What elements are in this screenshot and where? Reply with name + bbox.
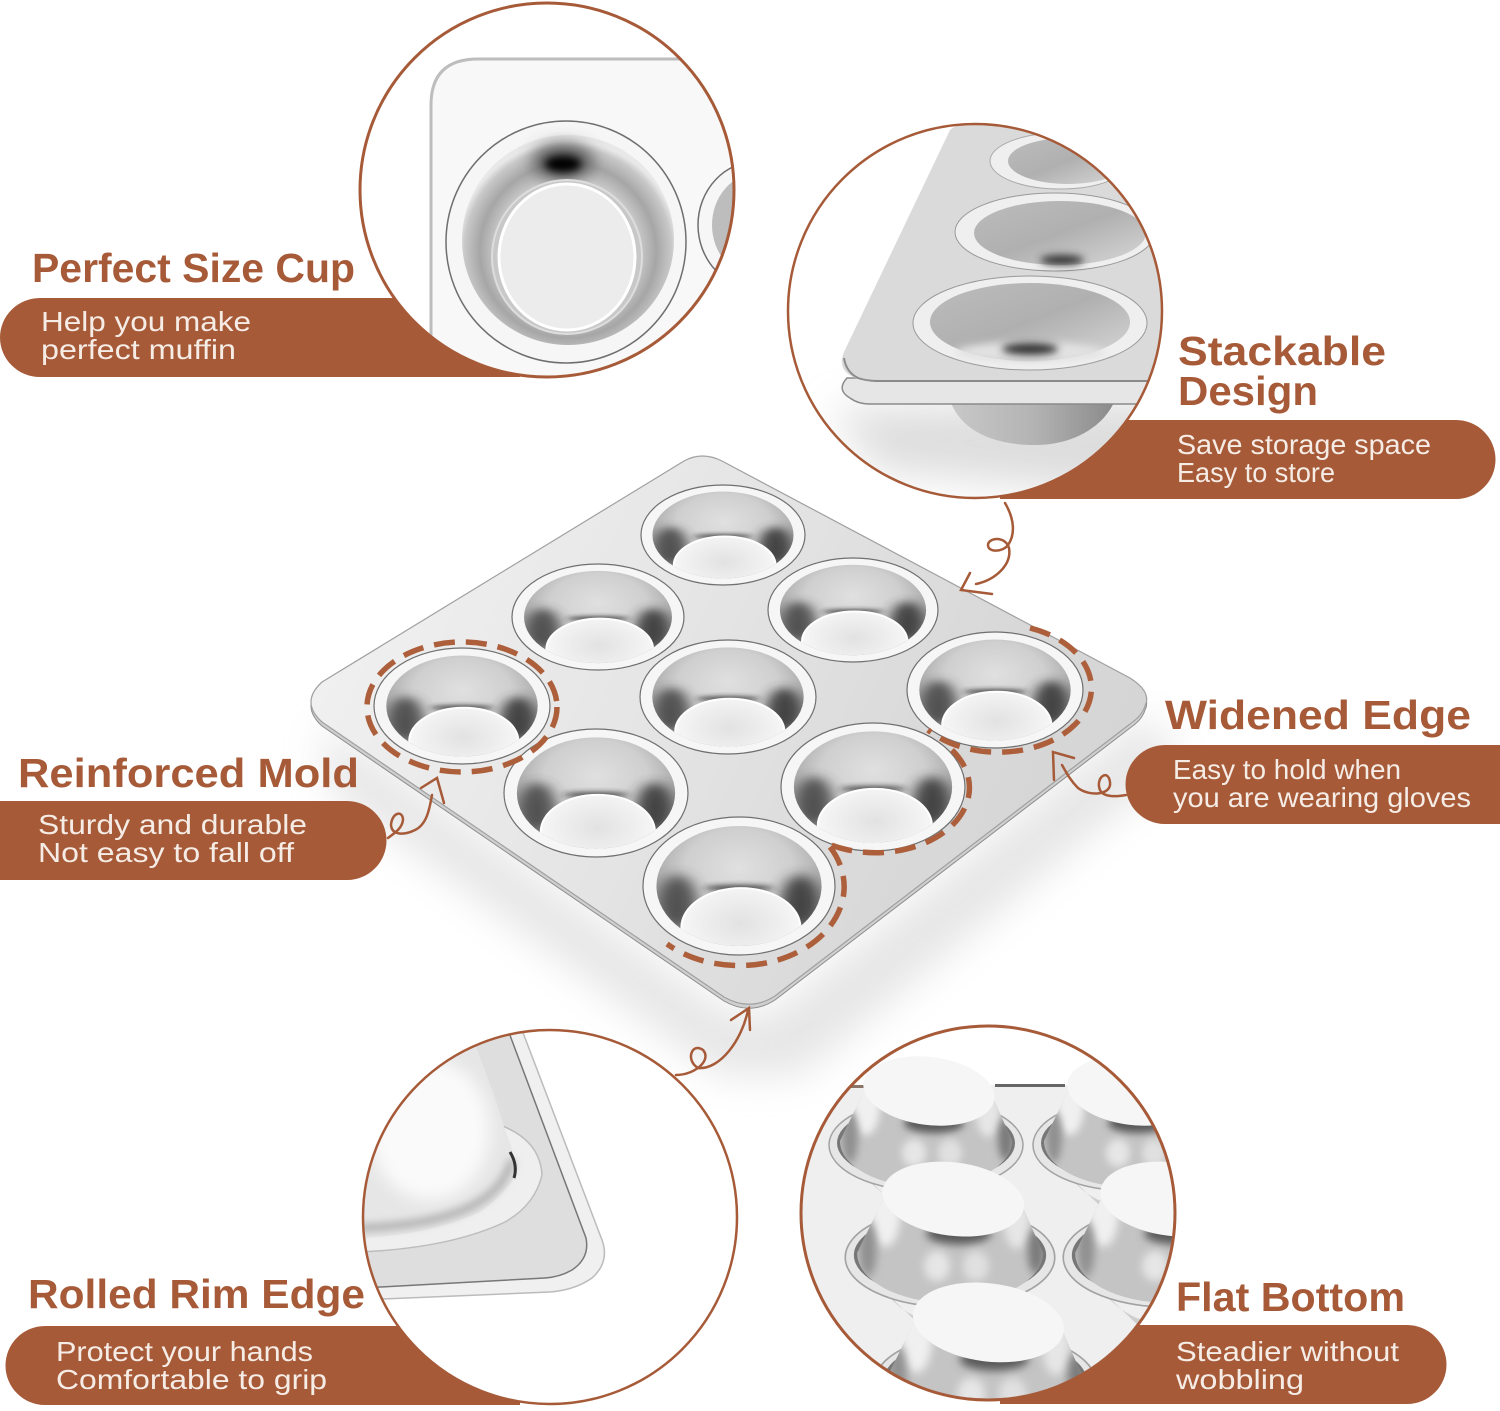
tray body (311, 456, 1147, 1004)
description: Protect your hands (56, 1336, 313, 1367)
pill (1126, 745, 1500, 824)
heading: Stackable (1178, 328, 1386, 374)
circle detail: cup top view (358, 2, 736, 378)
circle detail: rolled rim (360, 1030, 737, 1404)
pill (1000, 1325, 1446, 1404)
arrow: stackable design (961, 503, 1013, 594)
circle detail: inverted cups (800, 1024, 1176, 1402)
tray shadow (322, 716, 1180, 1075)
circle detail: stacked pans (788, 124, 1180, 500)
callout: perfect size cup (0, 245, 520, 377)
pill (1000, 420, 1496, 499)
callout: widened edge (1126, 692, 1500, 824)
callout: reinforced mold (0, 750, 386, 880)
heading: Design (1178, 368, 1318, 414)
description: Sturdy and durable (38, 809, 307, 840)
dashed highlight rings (367, 628, 1091, 966)
pill (0, 298, 520, 377)
description: Easy to hold when (1173, 754, 1401, 785)
description: Steadier without (1176, 1336, 1399, 1367)
description: wobbling (1175, 1364, 1304, 1395)
description: you are wearing gloves (1173, 782, 1471, 813)
description: Help you make (41, 306, 251, 337)
description: perfect muffin (41, 334, 236, 365)
callout: stackable design (1000, 328, 1496, 499)
muffin cups (374, 485, 1083, 967)
pill (6, 1326, 520, 1405)
arrow: widened edge (1053, 752, 1126, 796)
callout: flat bottom (1000, 1274, 1446, 1404)
pill (0, 801, 386, 880)
description: Save storage space (1177, 429, 1431, 460)
arrow: reinforced mold (388, 778, 444, 838)
arrow: rolled rim edge (676, 1008, 750, 1075)
heading: Rolled Rim Edge (28, 1271, 365, 1317)
tray rim (311, 460, 1147, 1008)
main muffin tray (311, 456, 1147, 1008)
heading: Flat Bottom (1176, 1274, 1405, 1320)
description: Not easy to fall off (38, 837, 294, 868)
heading: Reinforced Mold (18, 750, 359, 796)
heading: Perfect Size Cup (32, 245, 355, 291)
description: Comfortable to grip (56, 1364, 327, 1395)
description: Easy to store (1177, 457, 1335, 488)
heading: Widened Edge (1165, 692, 1471, 738)
callout: rolled rim edge (6, 1271, 520, 1405)
